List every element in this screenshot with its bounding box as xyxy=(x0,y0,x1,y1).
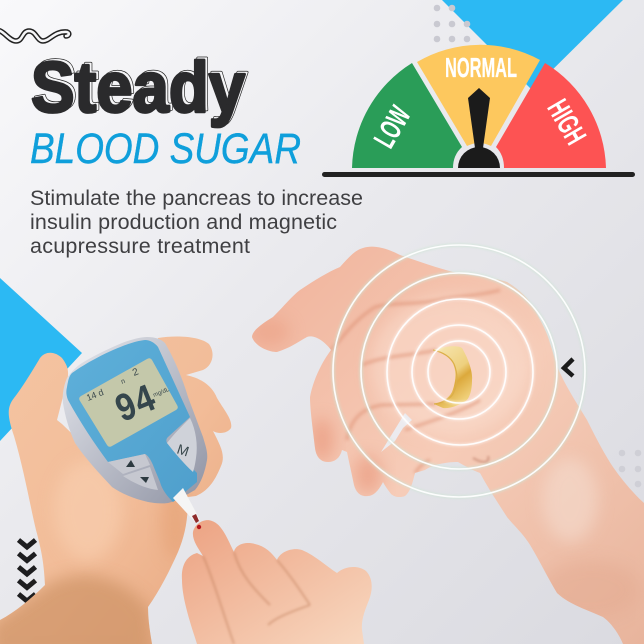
meter screen xyxy=(79,358,178,447)
blood drop xyxy=(197,525,201,529)
hand with ring xyxy=(250,247,644,644)
gold ring xyxy=(433,346,472,408)
ring edge xyxy=(433,350,457,404)
gauge low segment xyxy=(352,63,462,168)
title: Steady: Steady xyxy=(34,47,248,126)
blue triangle top right xyxy=(442,0,623,90)
description text xyxy=(30,186,363,258)
gauge xyxy=(322,45,635,177)
down button xyxy=(123,467,158,490)
pricked hand xyxy=(182,520,372,644)
small screen labels xyxy=(85,366,171,403)
gauge needle xyxy=(468,88,490,148)
gauge normal segment xyxy=(417,45,540,146)
description text: Stimulate the pancreas to increase xyxy=(30,186,363,210)
reading 94: 94 xyxy=(109,378,163,435)
wave decoration xyxy=(0,30,69,41)
hand holding meter xyxy=(0,336,231,644)
small screen labels: n xyxy=(120,378,126,386)
up arrow xyxy=(126,460,135,467)
finger gap lines xyxy=(331,290,500,473)
meter body xyxy=(63,337,207,503)
M label: M xyxy=(175,441,191,459)
concentric rings xyxy=(333,245,585,497)
chevrons left xyxy=(18,540,36,601)
gap between fingers xyxy=(381,413,412,452)
small screen labels: 2 xyxy=(131,366,141,379)
gauge label low: LOW xyxy=(368,100,418,154)
meter blue face xyxy=(66,340,197,502)
M button xyxy=(167,418,197,472)
chevron right xyxy=(564,359,573,376)
gauge label high: HIGH xyxy=(540,94,592,150)
small screen labels: 14 d xyxy=(85,387,105,403)
wrist crease xyxy=(473,456,488,462)
dot pattern right xyxy=(619,450,641,487)
strip red tip xyxy=(192,514,199,523)
down arrow xyxy=(140,477,149,483)
title: Steady: Steady xyxy=(31,49,245,128)
glucose meter xyxy=(63,337,207,503)
up button xyxy=(108,454,150,474)
gauge hub xyxy=(458,147,500,168)
gauge high segment xyxy=(496,63,606,168)
blue triangle left xyxy=(0,278,82,441)
dot pattern top xyxy=(434,5,470,42)
gauge label normal: NORMAL xyxy=(445,52,517,83)
small screen labels: mg/dL xyxy=(153,387,171,399)
title: Steady: Steady xyxy=(34,47,248,126)
hand shading xyxy=(0,460,189,644)
description text: insulin production and magnetic xyxy=(30,210,337,234)
hand shading xyxy=(250,290,640,620)
gauge base line xyxy=(322,172,635,177)
finger creases xyxy=(203,552,310,644)
test strip xyxy=(173,488,200,523)
description text: acupressure treatment xyxy=(30,234,250,258)
subtitle: BLOOD SUGAR: BLOOD SUGAR xyxy=(30,125,301,173)
